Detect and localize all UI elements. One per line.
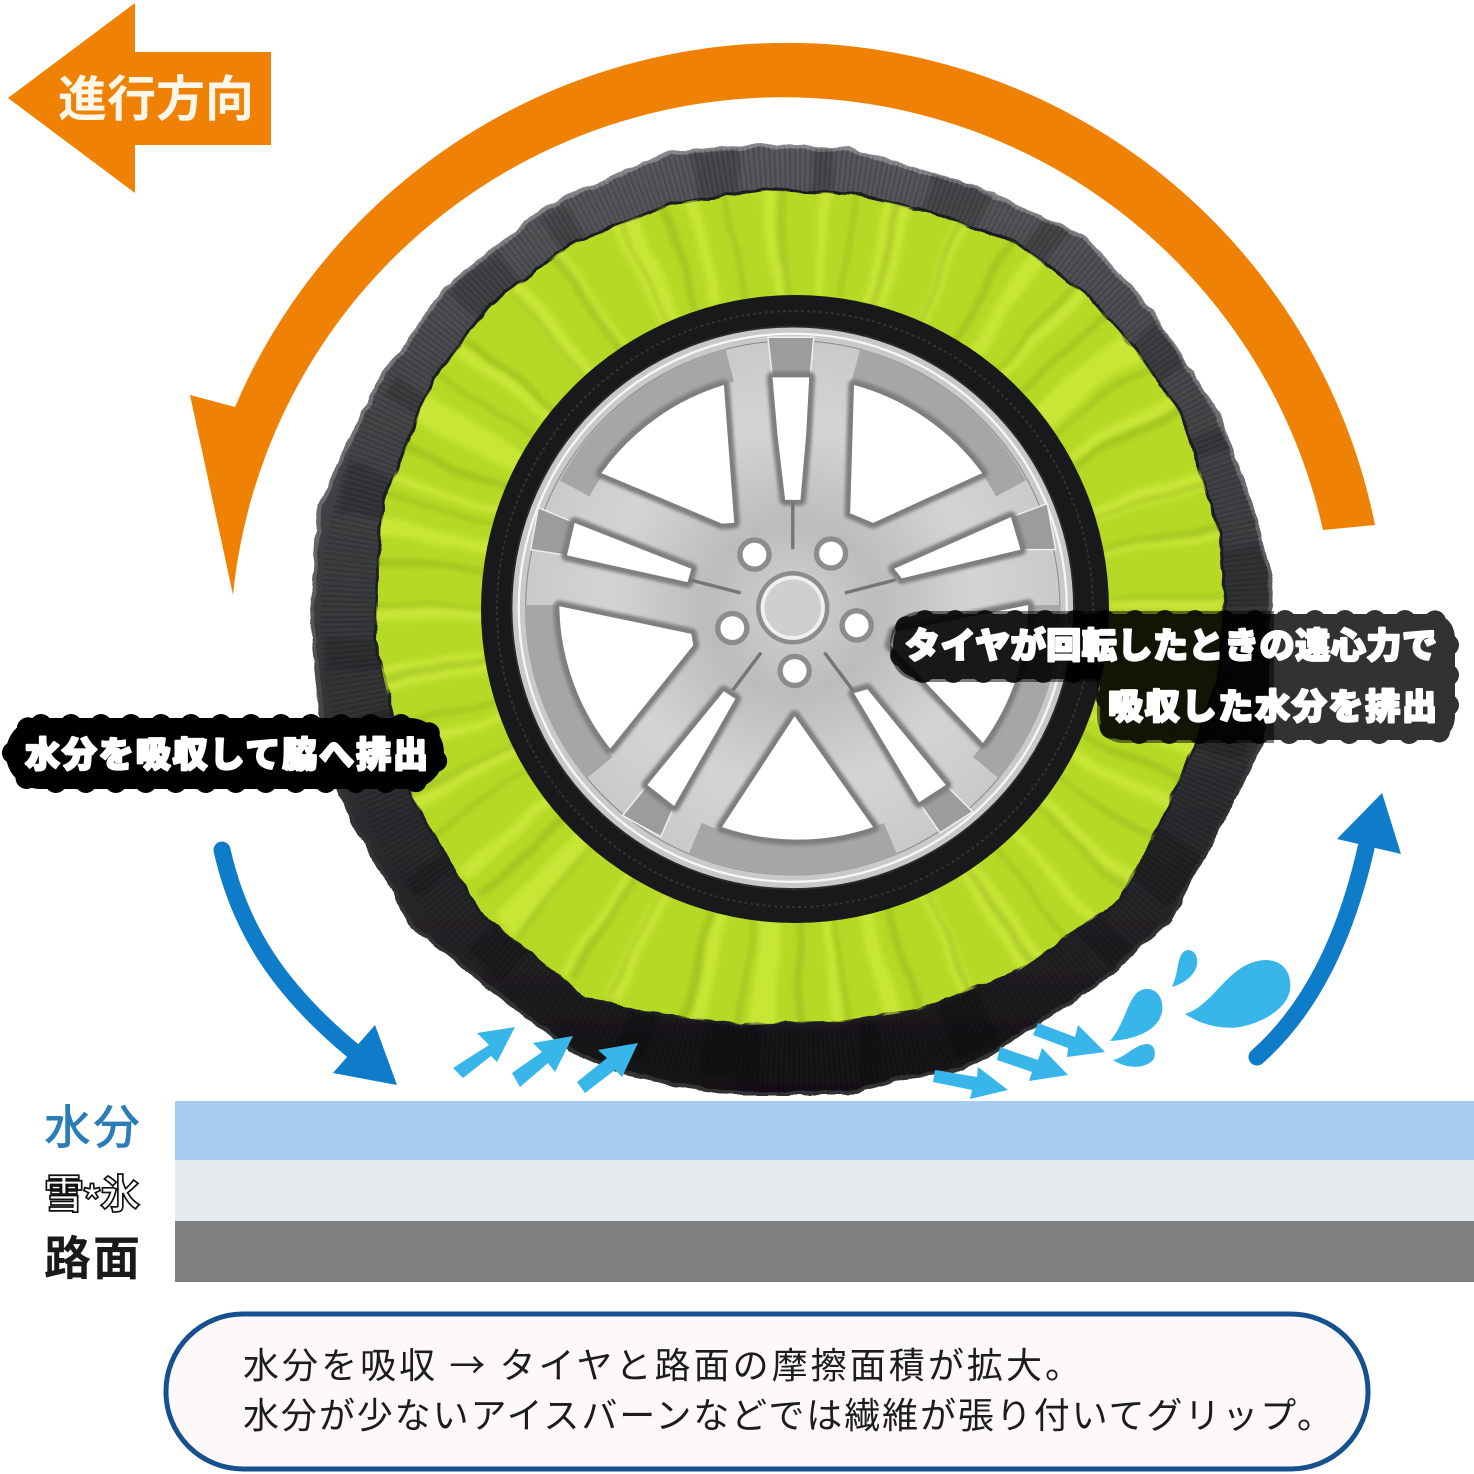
rim pockets: [542, 365, 1043, 858]
orange rotation arrow: [190, 43, 1375, 595]
water splash drops: [1110, 950, 1290, 1067]
callout label: centrifugal discharge: [900, 618, 1448, 733]
layer strip: snow and ice: 氷: [100, 1162, 140, 1220]
layer strip: snow and ice: 雪: [44, 1162, 84, 1220]
bevel around openings: [559, 377, 1028, 840]
water discharge arrows: [933, 1023, 1105, 1099]
callout label: absorb and drain aside: 水分を吸収して脇へ排出: [25, 727, 428, 778]
bolt holes: [718, 539, 871, 685]
layer strip: road surface: [44, 1220, 1474, 1289]
callout label: centrifugal discharge: タイヤが回転したときの遠心力で: [905, 618, 1437, 669]
explanation box: [166, 1314, 1368, 1469]
explanation box: 水分を吸収 → タイヤと路面の摩擦面積が拡大。: [243, 1337, 1081, 1389]
explanation box: 水分が少ないアイスバーンなどでは繊維が張り付いてグリップ。: [243, 1387, 1333, 1439]
direction arrow: 進行方向: 進行方向: [58, 60, 254, 131]
wheel openings: [559, 377, 1028, 840]
direction arrow: 進行方向: [8, 3, 271, 193]
narrow spoke pockets: [531, 337, 1056, 837]
wheel with textile snow sock: [312, 146, 1270, 1093]
alloy rim: [511, 327, 1074, 889]
center hub: [756, 571, 830, 645]
layer strip: water: [44, 1089, 1474, 1160]
layer strip: water: 水分: [44, 1089, 140, 1158]
water absorption arrows: [453, 1027, 638, 1093]
inner black hem: [481, 295, 1109, 923]
layer strip: snow and ice: *: [82, 1170, 102, 1228]
sock outer black band: [312, 146, 1270, 1093]
blue arrow: water thrown upward: [1257, 793, 1401, 1057]
layer strip: road surface: 路面: [44, 1220, 140, 1289]
sock green fabric: [375, 190, 1225, 1025]
blue arrow: water pressed toward ground: [222, 850, 397, 1085]
callout label: centrifugal discharge: 吸収した水分を排出: [1108, 679, 1437, 730]
spoke grooves: [691, 504, 894, 689]
layer strip: snow and ice: [44, 1160, 1474, 1228]
